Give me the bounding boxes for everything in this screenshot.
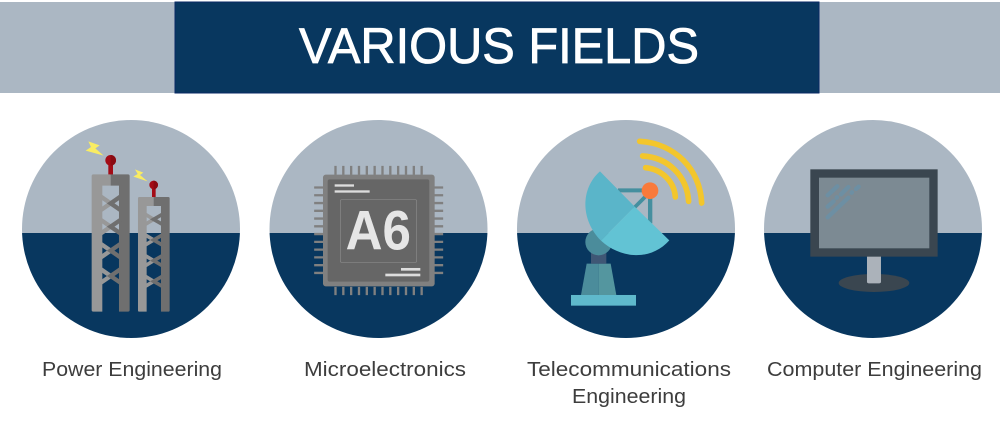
- label: telecommunications engineering: [527, 359, 731, 408]
- label: microelectronics: Microelectronics: [304, 359, 466, 381]
- panel: microelectronics: [269, 120, 488, 381]
- title banner: [175, 2, 819, 93]
- circle background: [517, 120, 735, 339]
- circle background: [764, 120, 982, 339]
- label: computer engineering: Computer Engineering: [767, 359, 982, 381]
- panel: telecommunications engineering: [517, 120, 735, 408]
- label: power engineering: Power Engineering: [42, 359, 222, 381]
- circle background: [269, 120, 488, 339]
- panel: power engineering: [22, 120, 240, 381]
- chip text: A6: [346, 200, 411, 262]
- header band: [0, 2, 1000, 93]
- label: telecommunications engineering: Engineering: [572, 386, 686, 408]
- icon: monitor: [810, 169, 938, 292]
- circle background: [22, 120, 240, 339]
- label: telecommunications engineering: Telecommunications: [527, 359, 731, 381]
- icon: transmission towers: [86, 141, 170, 312]
- icon: satellite dish: [571, 141, 702, 306]
- panel: computer engineering: [764, 120, 982, 381]
- title: VARIOUS FIELDS: [299, 18, 699, 74]
- icon: microchip: [319, 170, 439, 291]
